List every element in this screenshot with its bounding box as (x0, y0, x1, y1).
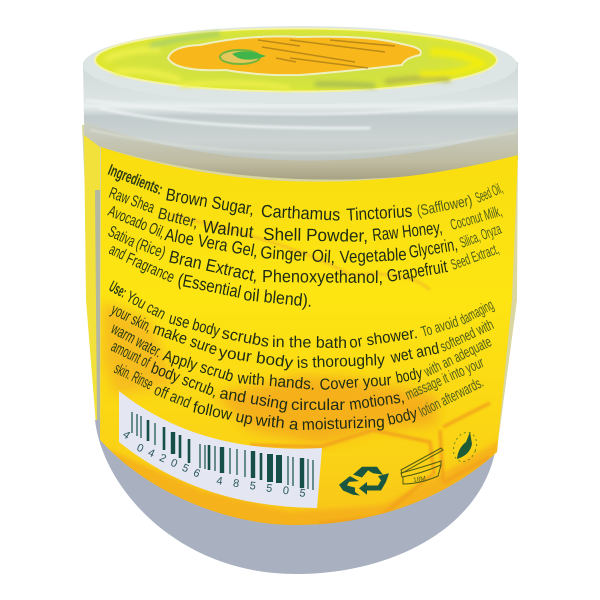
usage text: make sure (151, 321, 220, 359)
usage text: amount of (108, 338, 153, 372)
usage text: and using (218, 385, 289, 414)
icon: jar 18M (401, 448, 443, 484)
barcode bars (132, 412, 313, 490)
usage text: skin. Rinse (111, 360, 156, 394)
lid sticker (95, 28, 497, 92)
lid top face (83, 26, 517, 104)
usage text: is thoroughly (297, 352, 385, 372)
sticker swirls (105, 34, 485, 88)
ingredients text: Brown Sugar, (164, 184, 256, 219)
usage text: with hands. (236, 370, 316, 394)
barcode digits (120, 429, 306, 500)
label honeycomb pattern (250, 403, 490, 523)
usage text: Cover your (319, 372, 393, 394)
jar wall (82, 125, 518, 450)
sticker logo (220, 50, 266, 64)
usage text: circular (291, 397, 346, 414)
usage text: wet and (388, 340, 441, 367)
barcode sticker (119, 391, 322, 508)
jar neck under lid (84, 120, 518, 180)
ingredients text: Seed Oil, (473, 180, 505, 207)
yellow label (100, 147, 518, 535)
usage text: off and (152, 382, 193, 412)
usage text: Apply scrub (161, 348, 236, 386)
ingredients text: Aloe Vera Gel, (163, 224, 260, 261)
ingredients text: Glycerin, (407, 234, 459, 262)
usage text: softened with (438, 316, 496, 356)
usage text: lotion afterwards. (416, 374, 486, 421)
ingredients text (105, 162, 505, 311)
ingredients text: Seed Extract, (449, 241, 501, 274)
usage text: or shower. (348, 325, 419, 352)
ingredients text: Grapefruit (385, 256, 449, 286)
usage text: To avoid (419, 313, 461, 341)
usage text: body scrub, (149, 360, 220, 401)
ingredients text: oil blend). (243, 284, 313, 311)
ingredients text: Bran Extract, (167, 246, 260, 286)
usage text: in the bath (272, 334, 347, 352)
usage text: body (395, 365, 424, 387)
ingredients text: (Rice) (134, 236, 168, 262)
sticker orange centre (168, 36, 421, 75)
ingredients text: and (106, 241, 128, 264)
usage text: your body (217, 344, 294, 372)
usage text: massage it into your (403, 354, 486, 404)
ingredients text: (Essential (176, 269, 243, 302)
ingredients text: (Safflower) (415, 192, 474, 220)
ingredients text: Phenoxyethanol, (262, 266, 383, 287)
usage text: use body (167, 310, 222, 340)
usage text: moisturizing (302, 414, 385, 434)
usage text: You can (123, 289, 168, 323)
ingredients text: Butter, (156, 205, 200, 232)
ingredients text: Ingredients: (106, 162, 165, 199)
ingredients text: Fragrance (123, 250, 177, 286)
sticker small print (258, 40, 395, 68)
icon: recycle (339, 467, 389, 496)
orange honey patches (215, 375, 437, 445)
usage text: your skin, (108, 301, 154, 336)
jar base (95, 420, 497, 574)
icon: cruelty free (450, 429, 480, 465)
ingredients text: Vegetable (339, 244, 407, 267)
ingredients text: Walnut (202, 216, 255, 242)
product jar photo (82, 26, 518, 574)
usage text: body (386, 405, 419, 429)
usage text (106, 279, 497, 434)
usage text: damaging (457, 297, 497, 329)
lid side (83, 62, 518, 161)
usage text: follow up (191, 399, 254, 429)
usage text: motions, (348, 389, 406, 414)
icon: jar 18M: 18M (413, 475, 426, 484)
ingredients text: Ginger Oil, (260, 242, 336, 267)
barcode digits: 485505 (216, 475, 306, 500)
usage text: warm water. (108, 320, 165, 361)
ingredients text: Coconut Milk, (448, 203, 504, 234)
usage text: with a (254, 412, 299, 434)
ingredients text: Shell Powder, (263, 224, 368, 246)
usage text: with an adequate (421, 333, 494, 381)
barcode digits: 042056 (135, 442, 202, 480)
ingredients text: Sativa (105, 223, 138, 251)
barcode digits: 4 (120, 429, 132, 442)
usage text: scrubs (220, 325, 271, 351)
usage text: Use: (106, 279, 129, 302)
ingredients text: Avocado Oil, (105, 203, 167, 242)
ingredients text: Silica, Oryza (457, 221, 504, 252)
ingredients text: Carthamus (260, 201, 341, 225)
lid highlights (86, 100, 516, 153)
ingredients text: Tinctorius (346, 201, 413, 225)
ingredients text: Raw Honey, (371, 217, 443, 245)
ingredients text: Raw Shea (107, 185, 157, 217)
